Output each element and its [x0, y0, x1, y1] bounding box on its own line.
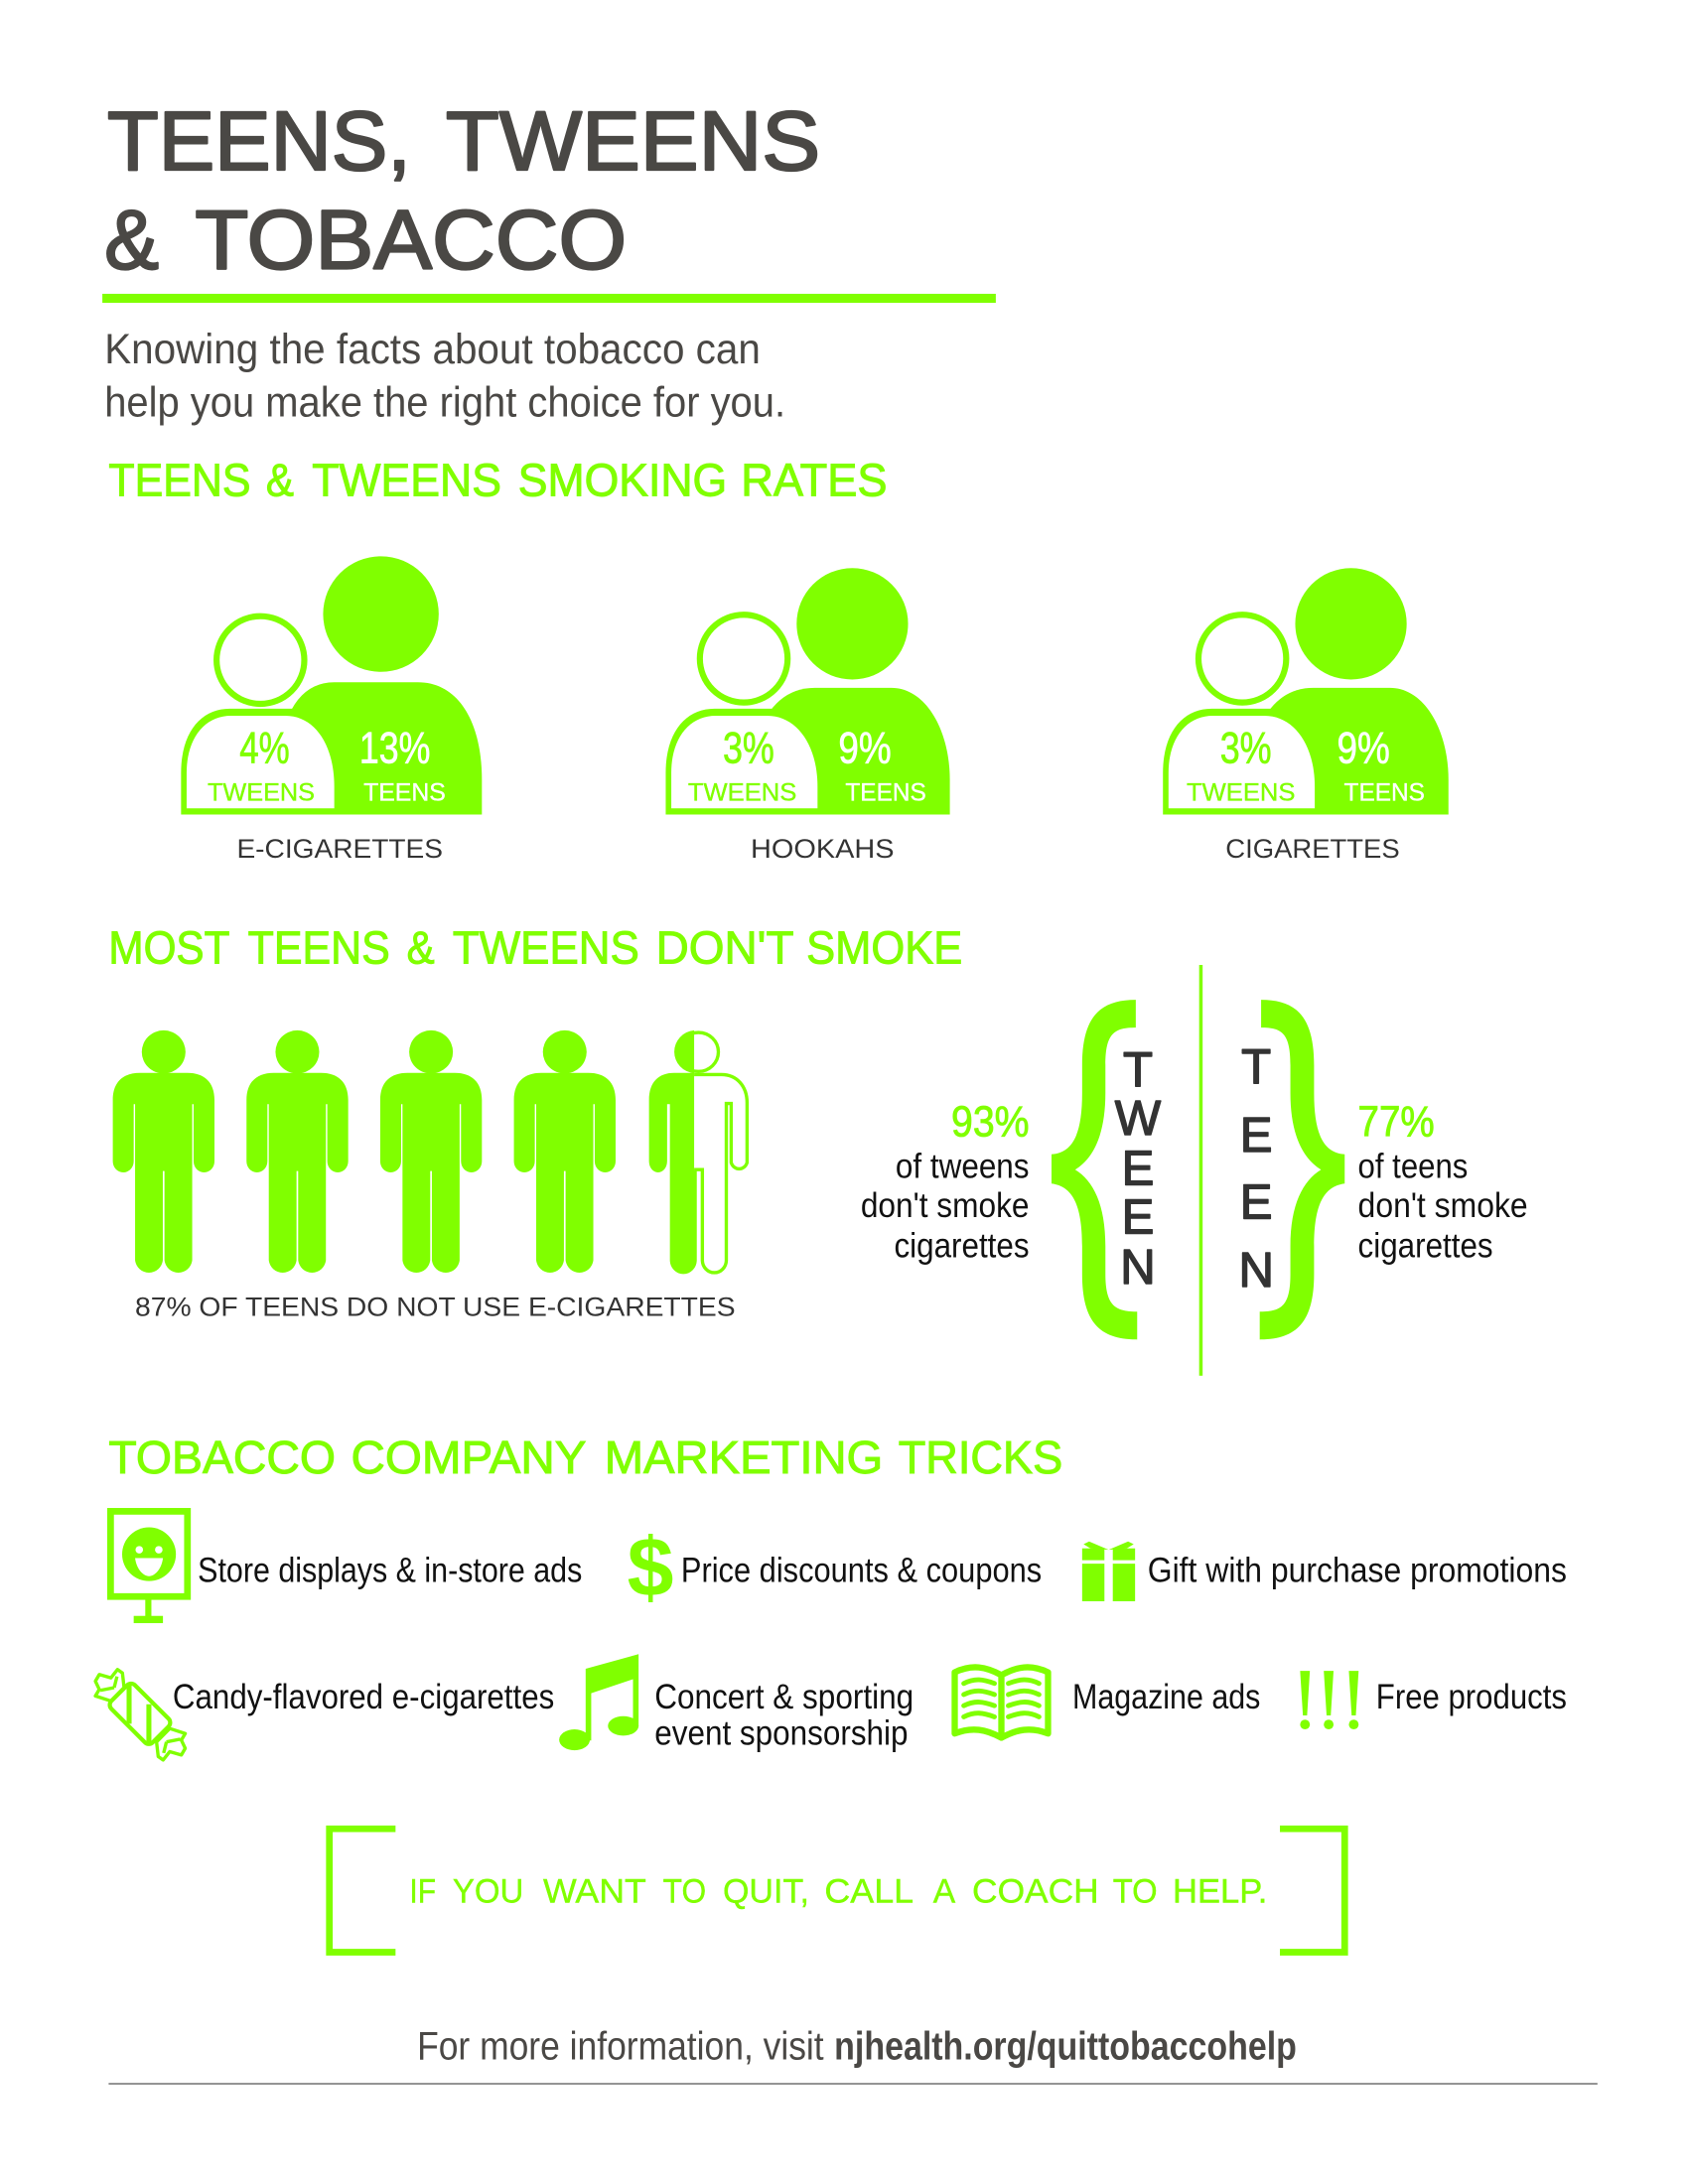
- brace: teen: [1260, 1000, 1344, 1339]
- icon: store display: [110, 1511, 188, 1623]
- heading: smoking rates: SMOKING: [518, 454, 727, 505]
- tween stat: 4%: [239, 723, 290, 773]
- callout text: QUIT,: [723, 1873, 809, 1911]
- label: Price discounts & coupons: [681, 1551, 1042, 1589]
- heading: smoking rates: TWEENS: [312, 454, 501, 505]
- teen stat: 9%: [1337, 723, 1390, 773]
- pictogram caption: 87% OF TEENS DO NOT USE E-CIGARETTES: [135, 1292, 736, 1321]
- heading: don't smoke: MOST: [108, 922, 229, 974]
- callout text: WANT: [543, 1873, 646, 1911]
- footer text: For more information, visit: [417, 2024, 824, 2068]
- icon: exclamation marks: [1300, 1671, 1358, 1729]
- icon: music notes: [559, 1654, 638, 1750]
- vertical word: tween: [1115, 1043, 1162, 1295]
- heading: marketing tricks: COMPANY: [351, 1432, 587, 1483]
- subtitle: Knowing the facts about tobacco can: [104, 326, 761, 373]
- teen stat text: don't smoke: [1358, 1186, 1528, 1225]
- divider line: [1199, 965, 1202, 1376]
- tween stat: TWEENS: [1187, 780, 1295, 807]
- tween stat text: 93%: [951, 1099, 1030, 1147]
- heading: smoking rates: [108, 454, 887, 505]
- subtitle: help you make the right choice for you.: [104, 378, 785, 426]
- subtitle: [104, 326, 785, 426]
- tween stat text: cigarettes: [894, 1227, 1030, 1266]
- label: Concert & sporting: [654, 1678, 914, 1716]
- item: candy: [95, 1670, 554, 1760]
- heading: smoking rates: &: [266, 454, 294, 505]
- tween stat: [688, 723, 796, 807]
- panel: cigarettes: [1163, 568, 1449, 864]
- vertical word: tween: W: [1115, 1092, 1162, 1146]
- tween stat: TWEENS: [688, 780, 796, 807]
- label: Magazine ads: [1072, 1678, 1260, 1716]
- callout text: HELP.: [1173, 1873, 1267, 1911]
- heading: don't smoke: TWEENS: [453, 922, 639, 974]
- heading: don't smoke: TEENS: [248, 922, 390, 974]
- callout text: [409, 1873, 1267, 1911]
- tween stat: [208, 723, 315, 807]
- icon: open book: [955, 1667, 1048, 1737]
- title: TEENS,: [107, 94, 411, 188]
- vertical word: teen: N: [1238, 1244, 1274, 1297]
- vertical word: teen: E: [1240, 1175, 1273, 1229]
- icon: candy: [95, 1670, 186, 1760]
- heading: marketing tricks: TRICKS: [899, 1432, 1062, 1483]
- icon: gift box: [1082, 1542, 1135, 1601]
- teen stat: TEENS: [1344, 780, 1425, 807]
- heading: don't smoke: [108, 922, 962, 974]
- person 3: [380, 1030, 482, 1273]
- teen stat: [359, 723, 446, 807]
- icon: dollar sign: $: [628, 1520, 673, 1613]
- label: Candy-flavored e-cigarettes: [173, 1678, 554, 1716]
- heading: don't smoke: DON'T: [656, 922, 794, 974]
- heading: don't smoke: &: [407, 922, 435, 974]
- icon: teen and tween figures: [665, 568, 950, 815]
- caption: E-CIGARETTES: [236, 834, 443, 864]
- label: [654, 1678, 914, 1752]
- title: &: [104, 194, 159, 287]
- item: concert: [559, 1654, 914, 1752]
- title: TWEENS: [446, 94, 820, 188]
- heading: don't smoke: SMOKE: [806, 922, 962, 974]
- label: Free products: [1376, 1678, 1567, 1716]
- tween stat: [1187, 723, 1295, 807]
- vertical word: teen: T: [1241, 1040, 1271, 1094]
- tween stat: TWEENS: [208, 780, 315, 807]
- person 1: [113, 1030, 214, 1273]
- callout text: A: [933, 1873, 955, 1911]
- person 5: partly filled: [649, 1030, 747, 1274]
- tween stat: 3%: [1220, 723, 1272, 773]
- vertical word: tween: T: [1123, 1043, 1153, 1097]
- title rule: [102, 294, 996, 303]
- teen stat text: cigarettes: [1358, 1227, 1493, 1266]
- teen stat text: of teens: [1358, 1148, 1468, 1186]
- teen stat text: 77%: [1358, 1099, 1435, 1147]
- teen stat: 9%: [838, 723, 892, 773]
- title: TOBACCO: [195, 194, 627, 287]
- icon: teen and tween figures: [1163, 568, 1449, 815]
- tween stat text: of tweens: [896, 1148, 1030, 1186]
- item: gift promotions: [1082, 1542, 1567, 1601]
- heading: smoking rates: TEENS: [108, 454, 250, 505]
- title: [104, 94, 820, 287]
- tween stat text: [861, 1099, 1030, 1266]
- tween stat: 3%: [723, 723, 774, 773]
- item: magazine: [955, 1667, 1260, 1737]
- right bracket: [1280, 1829, 1344, 1952]
- vertical word: tween: E: [1122, 1143, 1154, 1196]
- person 2: [246, 1030, 349, 1273]
- caption: CIGARETTES: [1225, 834, 1400, 864]
- callout text: TO: [1113, 1873, 1158, 1911]
- item: store displays: [110, 1511, 582, 1623]
- tween stat text: don't smoke: [861, 1186, 1030, 1225]
- left bracket: [330, 1829, 395, 1952]
- teen stat text: [1358, 1099, 1528, 1266]
- heading: marketing tricks: MARKETING: [605, 1432, 883, 1483]
- heading: marketing tricks: [108, 1432, 1062, 1483]
- teen stat: [1337, 723, 1425, 807]
- panel: hookahs: [665, 568, 950, 864]
- vertical word: teen: E: [1240, 1109, 1273, 1162]
- callout text: IF: [409, 1873, 436, 1911]
- vertical word: tween: N: [1120, 1241, 1156, 1295]
- label: Gift with purchase promotions: [1148, 1551, 1567, 1589]
- vertical word: teen: [1238, 1040, 1274, 1297]
- heading: marketing tricks: TOBACCO: [108, 1432, 336, 1483]
- vertical word: tween: E: [1122, 1191, 1154, 1245]
- icon: teen and tween figures: [181, 556, 482, 815]
- person 4: [514, 1030, 616, 1273]
- item: free products: [1300, 1671, 1567, 1729]
- callout text: TO: [663, 1873, 706, 1911]
- brace: tween: [1052, 1000, 1137, 1339]
- callout text: YOU: [453, 1873, 523, 1911]
- footer text: njhealth.org/quittobaccohelp: [834, 2024, 1297, 2068]
- heading: smoking rates: RATES: [741, 454, 887, 505]
- item: price discounts: [628, 1520, 1042, 1613]
- teen stat: TEENS: [845, 780, 926, 807]
- chart: five person pictogram: [113, 1030, 747, 1274]
- teen stat: [838, 723, 926, 807]
- callout text: COACH: [972, 1873, 1099, 1911]
- callout: quit coach: [330, 1829, 1344, 1952]
- label: event sponsorship: [654, 1713, 909, 1752]
- teen stat: TEENS: [363, 780, 446, 807]
- callout text: CALL: [824, 1873, 914, 1911]
- panel: e-cigarettes: [181, 556, 482, 864]
- caption: HOOKAHS: [751, 834, 894, 864]
- label: Store displays & in-store ads: [198, 1551, 582, 1589]
- teen stat: 13%: [359, 723, 430, 773]
